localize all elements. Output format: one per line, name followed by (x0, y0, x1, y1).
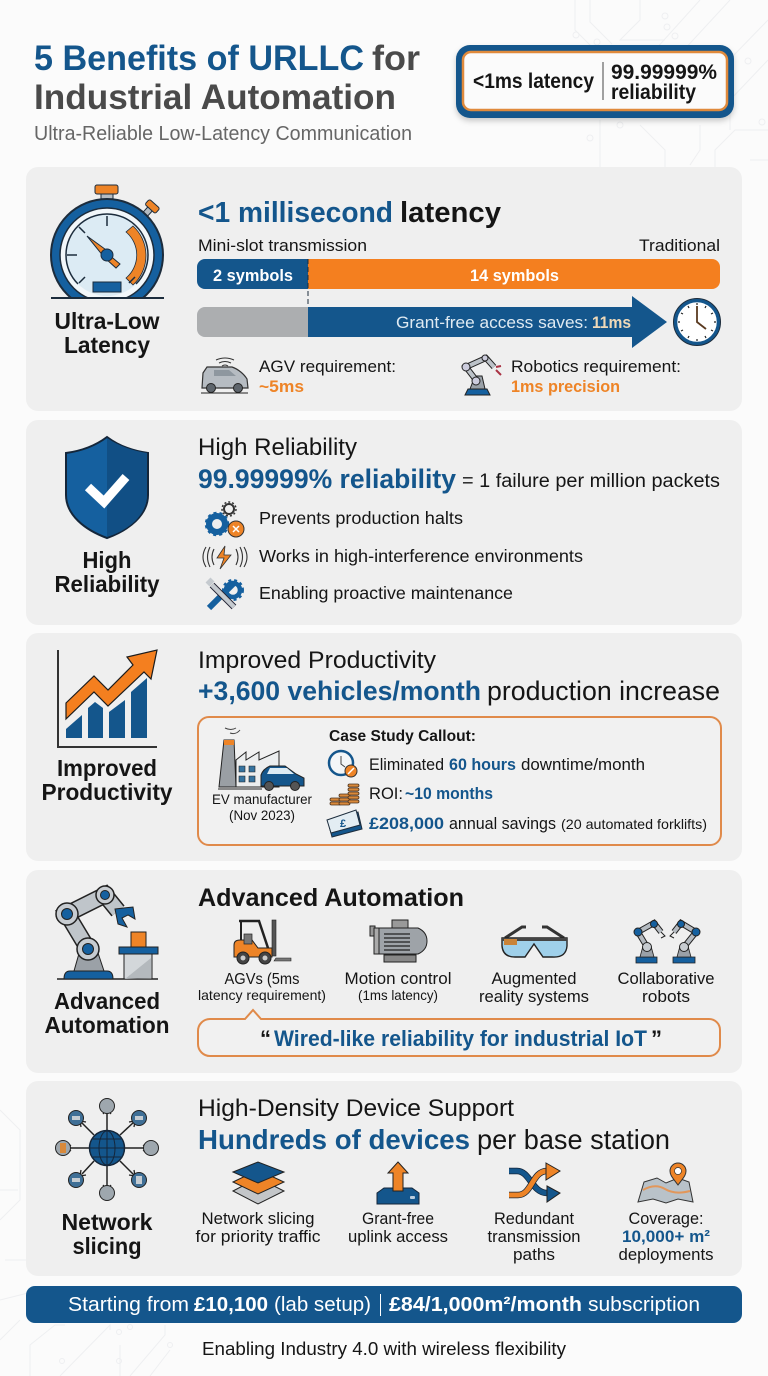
stat: hundreds of devices: per base station (477, 1124, 670, 1155)
AGV requirement text: ~5ms (259, 377, 304, 396)
heading: advanced automation: Advanced Automation (198, 884, 464, 912)
text: annual savings: £208,000 (369, 814, 444, 833)
stat: failure rate: = 1 failure per million packets (462, 471, 720, 492)
panel: advanced automation (26, 870, 742, 1073)
heading: high reliability: High Reliability (198, 434, 358, 461)
label: redundant transmission paths: paths (513, 1245, 555, 1264)
label: redundant transmission paths: Redundant (494, 1209, 574, 1228)
robotics requirement text (511, 357, 681, 396)
label: network slicing for priority traffic (196, 1209, 321, 1246)
heading: high-density device support: High-Density Device Support (198, 1095, 514, 1122)
case study subject: (Nov 2023) (229, 808, 295, 823)
panel label: improved productivity: Improved (57, 755, 157, 781)
text: proactive maintenance: Enabling proactive maintenance (259, 583, 513, 603)
panel label: advanced automation: Advanced (54, 988, 160, 1014)
label: motion control (344, 970, 452, 1003)
pricing bar: (lab setup) (274, 1293, 371, 1316)
AGV requirement text (259, 357, 396, 396)
badge: latency and reliability: 99.99999% (611, 61, 717, 84)
stat: hundreds of devices: Hundreds of devices (198, 1124, 470, 1155)
label: augmented reality systems: Augmented (492, 970, 576, 988)
pricing bar: £84/1,000m²/month (389, 1293, 582, 1316)
title (34, 39, 420, 117)
panel label: advanced automation (44, 988, 170, 1038)
text: ROI: ROI: (369, 784, 403, 803)
text: annual savings: annual savings (449, 814, 556, 833)
badge: latency and reliability: reliability (611, 81, 696, 104)
robotics requirement text: Robotics requirement: (511, 357, 681, 376)
stat: hundreds of devices (198, 1124, 670, 1155)
panel label: network slicing: Network (62, 1209, 153, 1235)
panel label: high reliability (54, 547, 160, 597)
label: network slicing for priority traffic: Network slicing (202, 1209, 314, 1228)
robotics requirement text: 1ms precision (511, 377, 620, 396)
text: downtime (369, 755, 645, 774)
callout: wired-like reliability quote (198, 1010, 720, 1056)
label: AGVs: AGVs (5ms (224, 971, 300, 988)
panel label: improved productivity (42, 755, 173, 805)
text: ROI: ~10 months (405, 784, 493, 803)
heading: latency: <1 millisecond (198, 197, 393, 229)
icon: robot arm with workstation (56, 886, 158, 979)
panel label: network slicing (62, 1209, 153, 1259)
icon: stopwatch (51, 185, 164, 311)
callout: wired-like reliability quote: “ (260, 1026, 271, 1051)
icon: collaborative robots (634, 920, 700, 963)
callout: wired-like reliability quote: Wired-like reliability for industrial IoT (274, 1026, 648, 1051)
label: collaborative robots: robots (642, 988, 690, 1006)
heading: improved productivity: Improved Productivity (198, 647, 437, 674)
label: redundant transmission paths (488, 1209, 580, 1264)
panel label: high reliability: Reliability (54, 571, 160, 597)
callout: case study (198, 717, 721, 845)
panel label: advanced automation: Automation (44, 1012, 170, 1038)
icon: coins (330, 784, 359, 805)
panel: improved productivity (26, 633, 742, 861)
label: grant-free uplink access: uplink access (348, 1227, 448, 1246)
text: high-interference environments: Works in high-interference environments (259, 546, 583, 566)
case study subject: EV manufacturer (212, 792, 312, 807)
stat: failure rate: 99.99999% reliability (198, 464, 456, 494)
panel: ultra-low latency (26, 167, 742, 411)
label: network slicing for priority traffic: for priority traffic (196, 1227, 321, 1246)
label: augmented reality systems: reality systems (479, 988, 589, 1006)
pricing bar (26, 1286, 742, 1323)
pricing bar: Starting from (68, 1293, 189, 1316)
panel label: ultra-low latency: Latency (64, 332, 150, 358)
symbols comparison bar: 2 symbols (213, 266, 293, 285)
panel label: improved productivity: Productivity (42, 779, 173, 805)
bar labels: Traditional (639, 236, 720, 255)
label: augmented reality systems (479, 970, 589, 1006)
badge: latency and reliability: <1ms latency (473, 70, 594, 93)
icon: stacked layers (233, 1162, 284, 1204)
icon: AGV van (201, 358, 248, 393)
callout: wired-like reliability quote: ” (651, 1026, 662, 1051)
heading: latency: latency (400, 197, 501, 229)
pricing bar: subscription (588, 1293, 700, 1316)
title: Industrial Automation (34, 78, 396, 117)
label: collaborative robots: Collaborative (618, 970, 714, 988)
label: coverage: Coverage: (628, 1209, 704, 1228)
badge: latency and reliability (456, 45, 734, 118)
bar labels (198, 236, 720, 255)
panel label: high reliability: High (82, 547, 132, 573)
stat: production increase: +3,600 vehicles/month (198, 676, 481, 706)
icon: AR glasses (502, 927, 567, 957)
icon: map pin (638, 1163, 693, 1203)
tagline: Enabling Industry 4.0 with wireless flexibility (202, 1339, 566, 1359)
icon: clock alert (329, 751, 357, 777)
label: coverage (618, 1209, 714, 1264)
symbols comparison bar (197, 259, 720, 307)
panel label: ultra-low latency (54, 308, 160, 358)
icon: clock (674, 298, 720, 346)
heading: latency (198, 197, 501, 229)
label: motion control: Motion control (344, 970, 452, 988)
bar labels: Mini-slot transmission (198, 236, 367, 255)
stat: production increase (198, 676, 720, 706)
label: redundant transmission paths: transmission (488, 1227, 580, 1246)
text: downtime: downtime/month (521, 755, 645, 774)
icon: grant-free uplink (377, 1162, 419, 1204)
case study heading: Case Study Callout: (329, 728, 476, 745)
text: prevents production halts: Prevents production halts (259, 508, 463, 528)
label: grant-free uplink access: Grant-free (362, 1209, 434, 1228)
label: collaborative robots (618, 970, 714, 1006)
icon: redundant paths (509, 1163, 560, 1202)
text: annual savings (369, 814, 707, 833)
stat: failure rate (198, 464, 720, 494)
text: downtime: Eliminated (369, 755, 444, 774)
case study subject (212, 792, 312, 823)
text: ROI (369, 784, 493, 803)
AGV requirement text: AGV requirement: (259, 357, 396, 376)
label: coverage: deployments (618, 1245, 714, 1264)
icon: robot arm small (462, 355, 501, 395)
icon: factory with car (218, 728, 304, 790)
panel label: network slicing: slicing (72, 1233, 142, 1259)
text: downtime: 60 hours (449, 755, 516, 774)
label: coverage: 10,000+ m² (622, 1227, 710, 1246)
label: AGVs (198, 971, 326, 1003)
arrow: grant-free access saves 11ms: 11ms (592, 313, 631, 332)
symbols comparison bar: 14 symbols (470, 266, 559, 285)
arrow: grant-free access saves 11ms (197, 296, 667, 348)
icon: growth chart (58, 650, 157, 747)
text: annual savings: (20 automated forklifts) (561, 816, 707, 832)
pricing bar: £10,100 (194, 1293, 268, 1316)
label: grant-free uplink access (348, 1209, 448, 1246)
icon: motor (370, 920, 427, 962)
icon: banknotes: £ (340, 818, 346, 830)
icon: shield (66, 437, 148, 538)
icon: forklift (234, 920, 291, 964)
panel label: ultra-low latency: Ultra-Low (54, 308, 160, 334)
subtitle: Ultra-Reliable Low-Latency Communication (34, 123, 412, 145)
icon: interference signal (203, 546, 247, 569)
arrow: grant-free access saves 11ms: Grant-free access saves: (396, 313, 588, 332)
label: AGVs: latency requirement) (198, 987, 326, 1003)
icon: banknotes (327, 810, 362, 837)
label: motion control: (1ms latency) (358, 987, 438, 1003)
icon: network hub (56, 1098, 158, 1200)
panel: high reliability (26, 420, 742, 625)
title: 5 Benefits of URLLC (34, 39, 364, 78)
icon: wrench and gear (208, 580, 243, 608)
panel: network slicing (26, 1081, 742, 1276)
title: for (372, 39, 420, 78)
icon: gears (206, 502, 244, 537)
stat: production increase: production increase (487, 676, 720, 706)
